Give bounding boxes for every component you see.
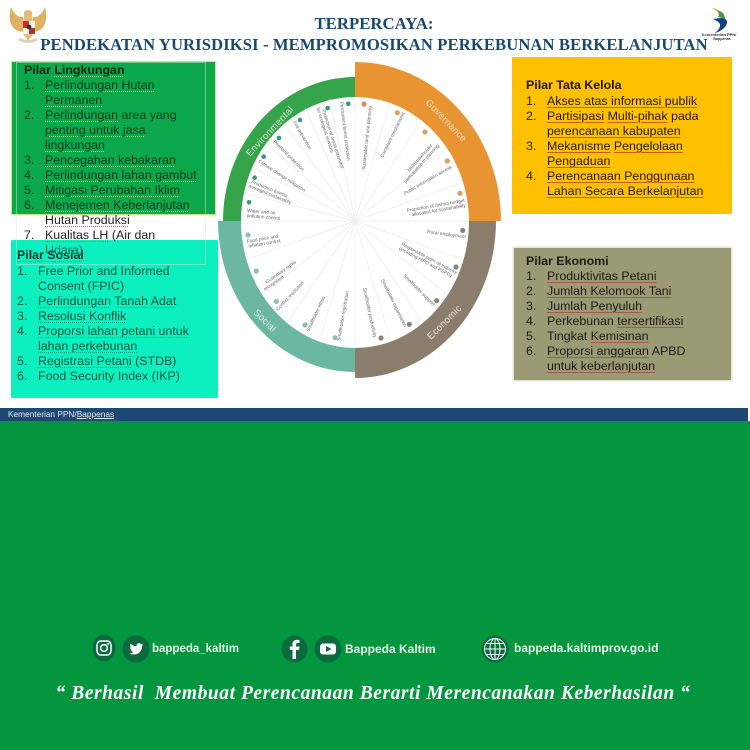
slide: top section: lingkungan xyxy=(45,138,105,152)
indicator dots: Economic xyxy=(378,228,465,341)
segment: Economic xyxy=(355,221,496,378)
segment: Governance xyxy=(355,62,501,221)
indicator labels: Smallholder productivity xyxy=(361,287,378,339)
slide: top section: 7. xyxy=(24,228,34,242)
indicator labels: Responsible palm oil industry xyxy=(400,242,457,276)
slide: top section: lahan perkebunan xyxy=(38,339,137,353)
indicator labels: (including ISPO and RSPO) xyxy=(398,246,453,279)
slide: top section: 4. xyxy=(17,324,27,338)
footer bar xyxy=(0,408,748,421)
indicator labels: Water and air xyxy=(247,209,276,216)
indicator labels: Public information access xyxy=(403,164,454,197)
list: indikator ekonomi xyxy=(526,269,685,373)
indicator labels: Sustainable land use planning xyxy=(361,106,374,170)
heading: Pilar Tata Kelola: Pilar Tata Kelola xyxy=(526,78,622,92)
tagline: “ Berhasil Membuat Perencanaan Berarti Merencanakan Keberhasilan “ xyxy=(56,683,690,704)
slide: top section: 2. xyxy=(24,108,34,122)
indicator labels: Rural employment xyxy=(427,229,467,240)
slide: top section: 1. xyxy=(526,269,536,283)
slide: top section xyxy=(0,7,748,421)
segment: Economic: Economic xyxy=(425,303,464,342)
indicator labels: Complaint mechanisms xyxy=(379,111,407,159)
logo: Kementerian PPN/Bappenas: Bappenas xyxy=(713,37,731,41)
slide: top section: Kualitas LH (Air dan xyxy=(45,228,155,242)
icon: globe xyxy=(482,636,508,662)
footer bar: Kementerian PPN/Bappenas xyxy=(8,409,114,419)
icon: facebook xyxy=(282,636,308,662)
indicator labels: Climate change mitigation xyxy=(257,159,307,194)
slide: top section: 3. xyxy=(526,139,536,153)
indicator labels: inflation control xyxy=(248,238,281,250)
indicator labels: Production forests xyxy=(250,180,288,199)
slide: top section: 5. xyxy=(24,183,34,197)
slide: top section: 2. xyxy=(526,109,536,123)
segment: Governance: Governance xyxy=(423,97,469,144)
list: indikator tata kelola xyxy=(526,94,704,198)
indicator labels xyxy=(246,102,467,341)
indicator labels: managed sustainably xyxy=(248,183,292,206)
logo: Kementerian PPN/Bappenas xyxy=(702,8,737,41)
slide: top section: Pencegahan kebakaran xyxy=(45,153,176,167)
slide: top section: Udara) xyxy=(45,243,83,257)
indicator labels: participation in planning xyxy=(403,143,441,185)
slide: top section: 3. xyxy=(24,153,34,167)
slide: top section: Consent (FPIC) xyxy=(38,279,124,293)
panel: Pilar Ekonomi xyxy=(512,246,732,382)
heading: Pilar Lingkungan: Pilar Lingkungan xyxy=(24,63,125,77)
slide: top section: Lahan Secara Berkelanjutan xyxy=(547,184,703,198)
slide: top section: Produktivitas Petani xyxy=(547,269,657,283)
logo: Kementerian PPN/Bappenas: Kementerian PPN/ xyxy=(702,32,737,37)
chart: sustainability wheel xyxy=(218,62,501,378)
segment: Social xyxy=(218,221,355,372)
list: indikator lingkungan xyxy=(24,78,197,257)
panel: green bottom section xyxy=(0,421,750,750)
indicator labels: Food price and xyxy=(246,234,279,245)
indicator labels: Conflict resolution xyxy=(275,280,306,312)
segment: Social: Social xyxy=(251,307,278,335)
title xyxy=(40,14,708,54)
slide: top section: Akses atas informasi publik xyxy=(547,94,697,108)
slide: top section: Free Prior and Informed xyxy=(38,264,170,278)
slide: top section: Perlindungan Hutan xyxy=(45,78,155,92)
text: Bappeda Kaltim: Bappeda Kaltim xyxy=(345,642,436,656)
slide: top section: Proporsi lahan petani untuk xyxy=(38,324,189,338)
indicator labels: recognition xyxy=(263,274,286,293)
slide: top section: Jumlah Penyuluh xyxy=(547,299,642,313)
icon: instagram xyxy=(92,634,116,662)
indicator labels: Smallholder ethos xyxy=(305,295,327,333)
slide: top section: Perlindungan area yang xyxy=(45,108,177,122)
slide: top section: untuk keberlanjutan xyxy=(547,359,655,373)
slide: top section: Perlindungan Tanah Adat xyxy=(38,294,176,308)
indicator labels: for ecological services xyxy=(314,107,335,154)
slide: top section: 1. xyxy=(526,94,536,108)
slide: top section: Pengaduan xyxy=(547,154,610,168)
panel: Pilar Lingkungan xyxy=(11,61,216,265)
slide: top section: Food Security Index (IKP) xyxy=(38,369,180,383)
slide: top section: Permanen xyxy=(45,93,102,107)
indicator labels: Permanent forest protection xyxy=(338,102,351,161)
slide: top section: 4. xyxy=(526,169,536,183)
icon: youtube xyxy=(314,636,342,662)
indicator labels: Customary rights xyxy=(265,259,298,285)
text: bappeda_kaltim: bappeda_kaltim xyxy=(152,643,239,655)
title: TERPERCAYA: xyxy=(314,14,434,33)
slide: top section: 5. xyxy=(17,354,27,368)
slide: top section: Hutan Produksi xyxy=(45,213,130,227)
indicator labels: Smallholder support xyxy=(402,273,436,308)
icon: twitter xyxy=(122,636,150,662)
indicator labels: Protection of areas important xyxy=(320,109,344,169)
slide: top section: 2. xyxy=(526,284,536,298)
slide: top section: Partisipasi Multi-pihak pada xyxy=(547,109,699,123)
heading: Pilar Ekonomi: Pilar Ekonomi xyxy=(526,254,609,268)
text: website: bappeda.kaltimprov.go.id xyxy=(514,641,658,655)
slide: top section: perencanaan kabupaten xyxy=(547,124,681,138)
slide: top section: 6. xyxy=(17,369,27,383)
slide: top section: 4. xyxy=(24,168,34,182)
indicator labels: Smallholder organisation xyxy=(379,278,408,329)
slide: top section: Perkebunan tersertifikasi xyxy=(547,314,683,328)
indicator labels: Smallholder registration xyxy=(336,290,351,341)
title: PENDEKATAN YURISDIKSI - MEMPROMOSIKAN PERKEBUNAN BERKELANJUTAN xyxy=(40,35,708,54)
slide: top section: 5. xyxy=(526,329,536,343)
slide: top section: 3. xyxy=(526,299,536,313)
slide: top section: Perencanaan Penggunaan xyxy=(547,169,694,183)
panel: Pilar Sosial xyxy=(11,240,218,398)
indicator labels: Multistakeholder xyxy=(406,143,434,173)
slide: top section: Jumlah Kelomook Tani xyxy=(547,284,671,298)
icon: garuda emblem xyxy=(10,7,46,43)
slide: top section: Tingkat Kemisinan xyxy=(547,329,648,343)
slide: top section: Registrasi Petani (STDB) xyxy=(38,354,176,368)
segment: Environmental xyxy=(223,77,355,221)
slide: top section: 4. xyxy=(526,314,536,328)
indicator labels: Peatland protection xyxy=(272,139,305,173)
slide: top section: 3. xyxy=(17,309,27,323)
slide: top section: Menejemen Keberlanjutan xyxy=(45,198,190,212)
slide: top section: 6. xyxy=(24,198,34,212)
slide: top section: Perlindungan lahan gambut xyxy=(45,168,197,182)
indicator labels: Proportion of district budget xyxy=(406,199,465,214)
indicator dots: Environmental xyxy=(247,101,351,205)
list: indikator sosial xyxy=(17,264,189,383)
indicator labels: allocated for sustainability xyxy=(411,203,467,218)
heading: Pilar Sosial: Pilar Sosial xyxy=(17,248,84,262)
segment: Environmental: Environmental xyxy=(244,104,296,159)
indicator dots: Governance xyxy=(361,101,463,196)
slide: top section: 1. xyxy=(17,264,27,278)
indicator labels: Fire prevention xyxy=(291,120,313,151)
indicator dots: Social xyxy=(245,232,338,340)
slide: top section: 2. xyxy=(17,294,27,308)
slide: top section: Mekanisme Pengelolaan xyxy=(547,139,683,153)
slide: top section: 1. xyxy=(24,78,34,92)
indicator labels: pollution control xyxy=(246,213,280,222)
slide: top section: penting untuk jasa xyxy=(45,123,146,137)
slide: top section: Mitigasi Perubahan Iklim xyxy=(45,183,180,197)
panel: Pilar Tata Kelola xyxy=(512,57,732,214)
slide: top section: Proporsi anggaran APBD xyxy=(547,344,685,358)
slide: top section: Resolusi Konflik xyxy=(38,309,126,323)
slide: top section: 6. xyxy=(526,344,536,358)
